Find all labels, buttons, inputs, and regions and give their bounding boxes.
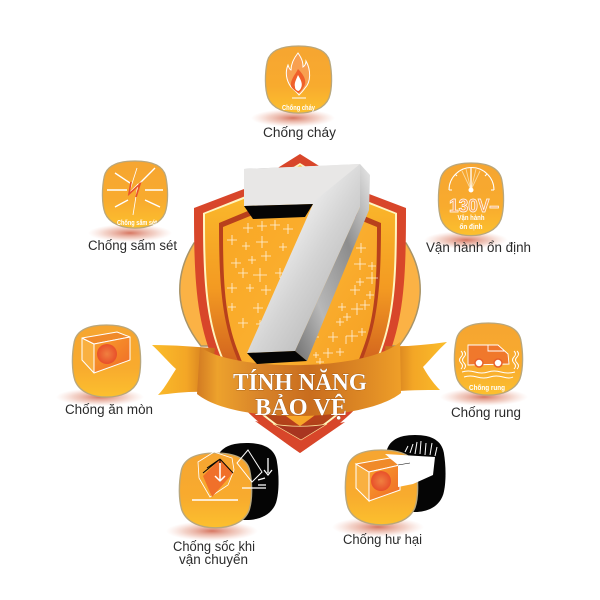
- label: Chống rung: [451, 405, 521, 420]
- badge shadow: [88, 224, 172, 242]
- feature: Chống sấm sét: [88, 161, 177, 253]
- label: Chống hư hại: [343, 532, 422, 547]
- badge: [179, 453, 252, 528]
- icon: damaged box: [356, 441, 437, 501]
- badge: [102, 161, 168, 228]
- ribbon tails: [152, 342, 447, 395]
- badge: [345, 450, 418, 525]
- label: Chống sốc khi: [173, 539, 255, 554]
- label: vận chuyển: [179, 552, 248, 567]
- label: Chống sấm sét: [88, 238, 177, 253]
- ribbon band: [197, 342, 401, 416]
- badge caption: ổn định: [460, 223, 482, 231]
- badge: [265, 46, 332, 113]
- badge shadow: [56, 388, 144, 406]
- icon: gauge: [449, 167, 494, 192]
- icon: box: [82, 332, 130, 373]
- number seven: [244, 164, 370, 364]
- shield: [194, 154, 406, 453]
- badge shadow: [332, 517, 424, 537]
- icon: van: [460, 345, 518, 378]
- badge: [454, 323, 523, 395]
- badge shadow: [251, 109, 335, 127]
- badge: [438, 163, 504, 236]
- feature: Chống rung: [440, 323, 528, 420]
- ribbon text: TÍNH NĂNG: [233, 369, 367, 396]
- label: Chống cháy: [263, 125, 336, 140]
- black back badge: [214, 443, 279, 520]
- icon: flame: [286, 53, 310, 98]
- label: Chống ăn mòn: [65, 402, 153, 417]
- ribbon text: BẢO VỆ: [255, 395, 347, 421]
- badge caption: Vận hành: [458, 215, 484, 222]
- badge caption: Chống rung: [469, 384, 505, 392]
- label: Vận hành ổn định: [426, 240, 531, 255]
- feature: Chống sốc khi vận chuyển: [166, 443, 279, 567]
- gauge reading: 130V–: [449, 196, 499, 216]
- sparkles: [227, 220, 378, 366]
- ribbon text: [233, 369, 367, 421]
- shield tip: [255, 421, 345, 453]
- badge caption: Chống sấm sét: [117, 219, 158, 227]
- side arcs behind shield: [180, 243, 420, 346]
- badge shadow: [440, 388, 528, 406]
- badge caption: [458, 215, 484, 231]
- feature: Vận hành ổn định: [424, 163, 531, 255]
- icon: falling box: [192, 450, 272, 500]
- icon: lightning: [107, 168, 163, 215]
- badge shadow: [424, 231, 508, 249]
- feature: Chống hư hại: [332, 435, 446, 547]
- feature: Chống cháy: [251, 46, 336, 140]
- label: [173, 539, 255, 567]
- feature: Chống ăn mòn: [56, 325, 153, 417]
- emblem: shield with seven and ribbon: [152, 154, 447, 453]
- badge: [72, 325, 141, 397]
- black back badge: [384, 435, 446, 512]
- badge shadow: [166, 521, 258, 541]
- badge caption: Chống cháy: [282, 104, 315, 112]
